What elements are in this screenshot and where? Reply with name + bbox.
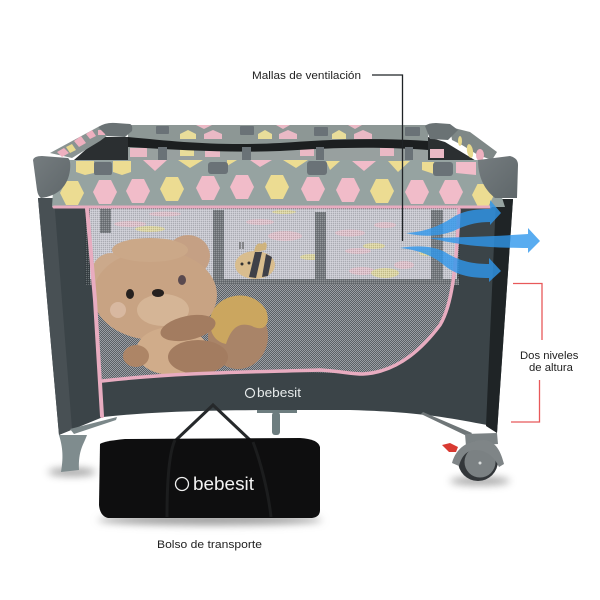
pink piping <box>54 207 490 416</box>
left and right dark posts <box>38 198 513 435</box>
bear face <box>126 289 134 299</box>
bag shadow <box>98 515 322 525</box>
top arrow <box>406 200 501 236</box>
bag body <box>99 438 320 518</box>
middle arrow <box>430 228 540 253</box>
honey pot <box>208 303 268 369</box>
back corner caps <box>98 123 458 140</box>
bee <box>235 242 275 279</box>
top height bracket <box>513 284 542 340</box>
label: height levels: de altura <box>529 362 574 374</box>
bear body <box>136 327 208 375</box>
label: carry bag: Bolso de transporte <box>157 539 262 551</box>
carry bag <box>98 405 322 525</box>
right front corner cap <box>478 156 518 198</box>
hexagons lower row <box>60 175 494 206</box>
left front corner cap <box>33 156 70 198</box>
right leg and wheel <box>421 412 504 481</box>
bear head <box>93 250 217 340</box>
bag handles <box>176 405 250 440</box>
see-through back panel <box>90 209 459 283</box>
side rail right <box>450 127 497 161</box>
label: height levels: Dos niveles <box>520 350 579 362</box>
airflow arrows <box>400 200 540 282</box>
straps seen through mesh <box>100 209 443 283</box>
crib <box>33 123 518 485</box>
left leg <box>59 417 117 472</box>
bag logo: bebesit <box>193 474 254 494</box>
hexagons upper row <box>76 160 476 175</box>
window floor mesh <box>85 208 460 381</box>
front body fabric <box>38 198 513 435</box>
brake lever <box>442 443 458 452</box>
bear <box>92 235 268 375</box>
crib shadows <box>48 468 510 485</box>
bottom height bracket <box>511 380 540 422</box>
label: ventilation: Mallas de ventilación <box>252 70 361 82</box>
fabric clips <box>94 126 453 176</box>
mesh window <box>85 208 460 381</box>
callout line: ventilation <box>372 75 402 241</box>
center support leg <box>257 410 297 435</box>
side rail left <box>50 127 108 158</box>
crib brand logo: bebesit <box>257 385 301 400</box>
bag straps <box>167 440 271 517</box>
bottom arrow <box>400 246 501 282</box>
bear ears <box>92 253 130 291</box>
top hex band <box>52 126 505 207</box>
wheel housing <box>452 440 504 467</box>
wheel <box>458 441 498 481</box>
back rail panel <box>74 125 478 162</box>
